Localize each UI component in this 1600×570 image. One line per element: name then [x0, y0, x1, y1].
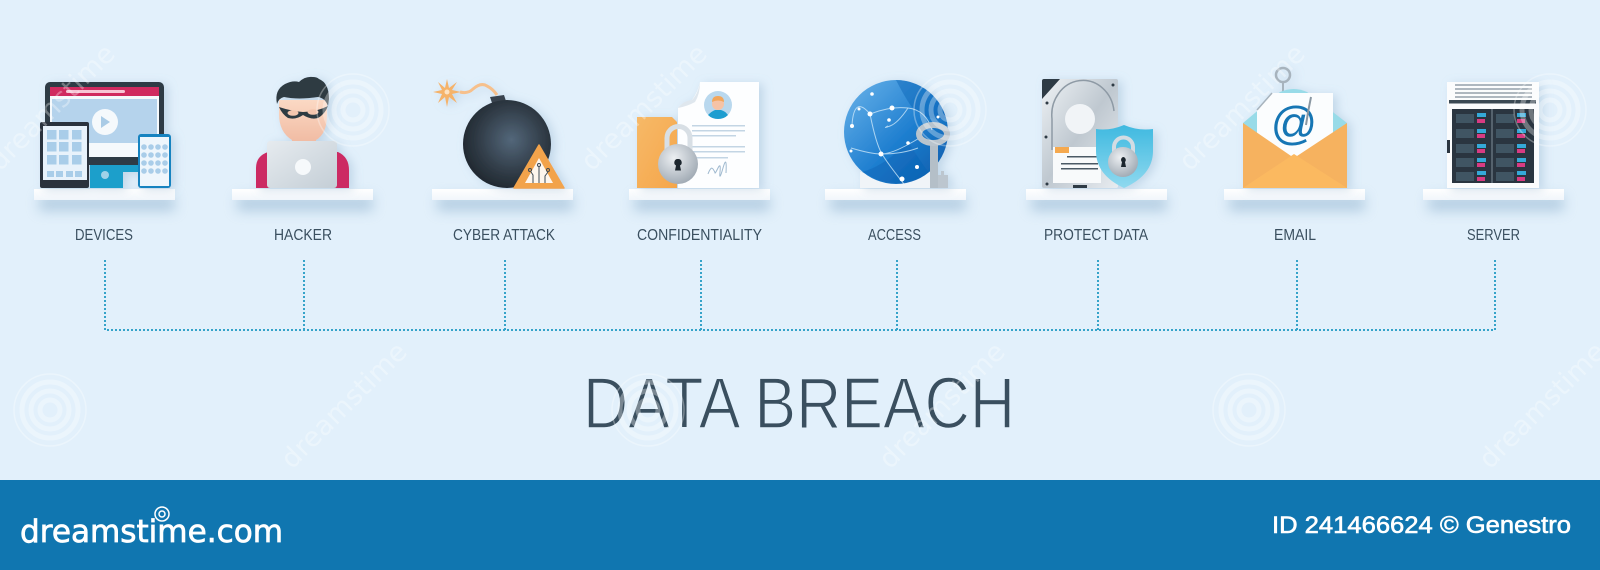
icon: cyber attack bomb: [433, 79, 564, 188]
labels: EMAIL: [1274, 227, 1316, 244]
labels: CYBER ATTACK: [453, 227, 555, 244]
watermarks: dreamstime: [575, 38, 714, 177]
dotted connector: [105, 260, 1495, 330]
labels: SERVER: [1467, 227, 1520, 244]
icon: confidentiality: [637, 82, 759, 188]
watermarks: dreamstime: [275, 336, 414, 475]
icon: email: [1243, 68, 1347, 188]
icon: protect data: [1042, 79, 1153, 188]
title: DATA BREACH: [583, 364, 1015, 444]
watermarks: dreamstime: [873, 336, 1012, 475]
footer bar: [0, 480, 1600, 570]
labels: DEVICES: [75, 227, 133, 244]
icon: access globe and key: [844, 80, 948, 188]
icon: hacker: [256, 77, 349, 188]
labels: CONFIDENTIALITY: [637, 227, 762, 244]
labels: ACCESS: [868, 227, 921, 244]
footer logo: dreamstime.com: [20, 514, 283, 550]
icon: server: [1447, 82, 1539, 188]
icon: devices: [40, 82, 171, 188]
labels: [75, 227, 1520, 244]
labels: HACKER: [274, 227, 332, 244]
server rack units: [1456, 113, 1526, 181]
watermarks: [0, 38, 1600, 475]
shelves: [34, 189, 1564, 211]
labels: PROTECT DATA: [1044, 227, 1148, 244]
icon: email: @: [1271, 97, 1317, 149]
footer credit: ID 241466624 © Genestro: [1272, 512, 1571, 539]
watermarks: dreamstime: [1173, 38, 1312, 177]
